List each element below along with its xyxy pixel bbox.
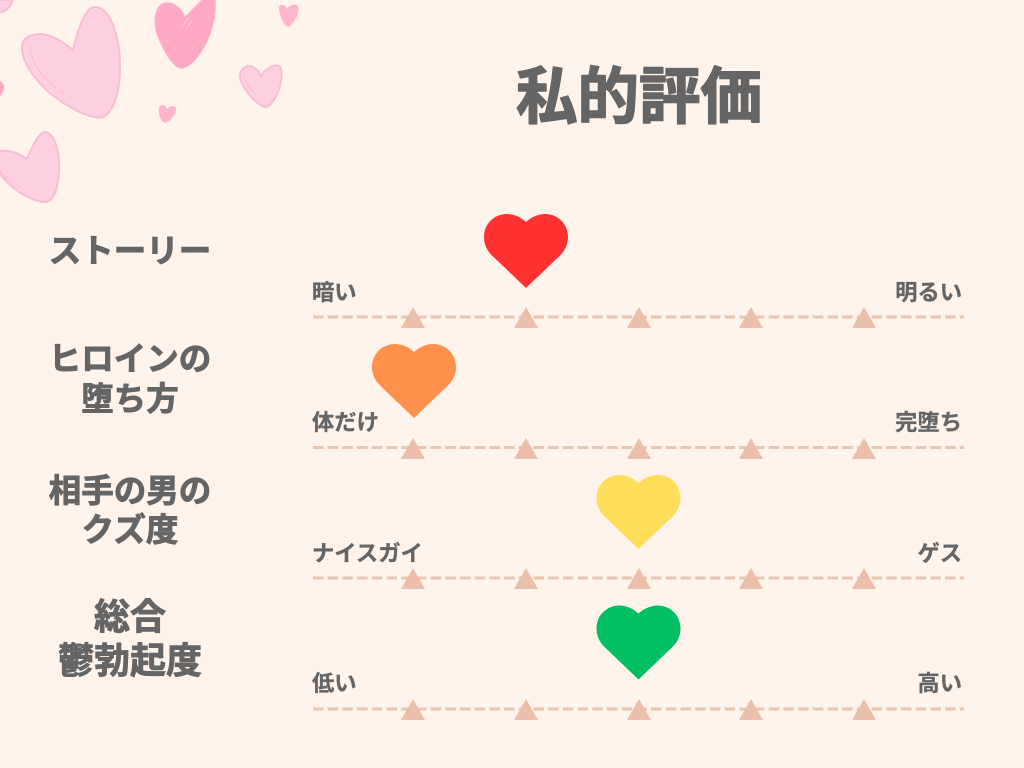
heart marker: green — [596, 606, 680, 680]
scale 2: heroine's fall: 体だけ — [312, 410, 379, 435]
row label: partner's scumminess: クズ度 — [82, 511, 178, 548]
heart marker: orange — [372, 344, 456, 418]
scale 3: partner's scumminess: ナイスガイ — [312, 541, 423, 566]
scale 1: story — [312, 214, 964, 328]
scale 4: overall: 高い — [917, 671, 962, 696]
scale 3: partner's scumminess: ゲス — [917, 541, 962, 566]
scale 1: story: 明るい — [895, 280, 962, 305]
row label: story: ストーリー — [49, 233, 211, 269]
scale 1: story: 暗い — [312, 280, 357, 305]
decoration: scattered pink hearts — [0, 0, 298, 202]
row label: heroine's fall: 堕ち方 — [81, 381, 179, 417]
row label: overall: 総合 — [94, 596, 166, 637]
title: 私的評価 — [516, 63, 762, 132]
scale 2: heroine's fall: 完堕ち — [895, 410, 962, 435]
heart marker: yellow — [596, 475, 680, 549]
heart marker: red — [484, 214, 568, 288]
row label: overall: 鬱勃起度 — [58, 640, 202, 681]
row label: partner's scumminess: 相手の男の — [49, 473, 211, 509]
row label: heroine's fall: ヒロインの — [49, 341, 211, 377]
scale 2: heroine's fall — [312, 344, 964, 459]
scale 4: overall — [312, 606, 964, 720]
scale 4: overall: 低い — [312, 671, 357, 696]
scale 3: partner's scumminess — [312, 475, 964, 589]
